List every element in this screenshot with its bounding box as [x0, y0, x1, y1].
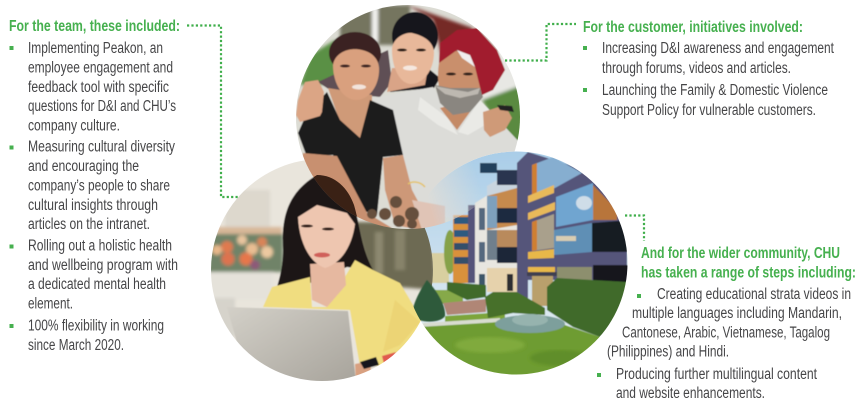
- list: customer: through forums, videos and articles.: [602, 60, 791, 77]
- list: team: employee engagement and: [28, 60, 173, 76]
- list: community: (Philippines) and Hindi.: [607, 344, 729, 360]
- list: community: Producing further multilingual content: [616, 366, 818, 383]
- list: customer: [602, 40, 835, 119]
- text block: community: [597, 245, 856, 402]
- connector: team: [187, 26, 238, 197]
- list: team: and encouraging the: [28, 158, 139, 175]
- list: team: Rolling out a holistic health: [28, 238, 172, 254]
- text block: team: [9, 18, 180, 354]
- list: team: company culture.: [28, 118, 120, 134]
- list: community: and website enhancements.: [616, 385, 765, 402]
- list: team: questions for D&I and CHU’s: [28, 98, 176, 115]
- bullets: customer: [583, 46, 587, 92]
- list: team: and wellbeing program with: [28, 257, 178, 274]
- list: team: element.: [28, 296, 73, 312]
- text block: customer: [583, 19, 835, 119]
- list: community: [607, 286, 851, 402]
- list: team: Measuring cultural diversity: [28, 138, 175, 156]
- overlap: woman's hair showing through the family photo: [314, 175, 357, 217]
- shrub in front of the garden: [412, 280, 445, 322]
- photo circle: apartment building: [420, 152, 628, 374]
- photo circle: woman with laptop: [211, 160, 433, 381]
- bullets: team: [10, 46, 14, 328]
- list: team: since March 2020.: [28, 337, 124, 354]
- list: team: articles on the intranet.: [28, 216, 150, 233]
- list: team: company’s people to share: [28, 178, 170, 194]
- list: team: feedback tool with specific: [28, 79, 169, 96]
- list: team: a dedicated mental health: [28, 276, 166, 293]
- list: team: cultural insights through: [28, 197, 158, 214]
- bullets: community: [597, 294, 641, 377]
- heading: customer: For the customer, initiatives involved:: [583, 19, 803, 36]
- connector: customer: [505, 24, 576, 60]
- photo circle: family of three: [296, 5, 520, 229]
- list: team: [28, 40, 178, 354]
- connector: community: [625, 216, 644, 241]
- list: team: 100% flexibility in working: [28, 318, 164, 334]
- list: team: Implementing Peakon, an: [28, 40, 163, 57]
- heading: team: For the team, these included:: [9, 18, 180, 35]
- heading: community: [641, 245, 856, 282]
